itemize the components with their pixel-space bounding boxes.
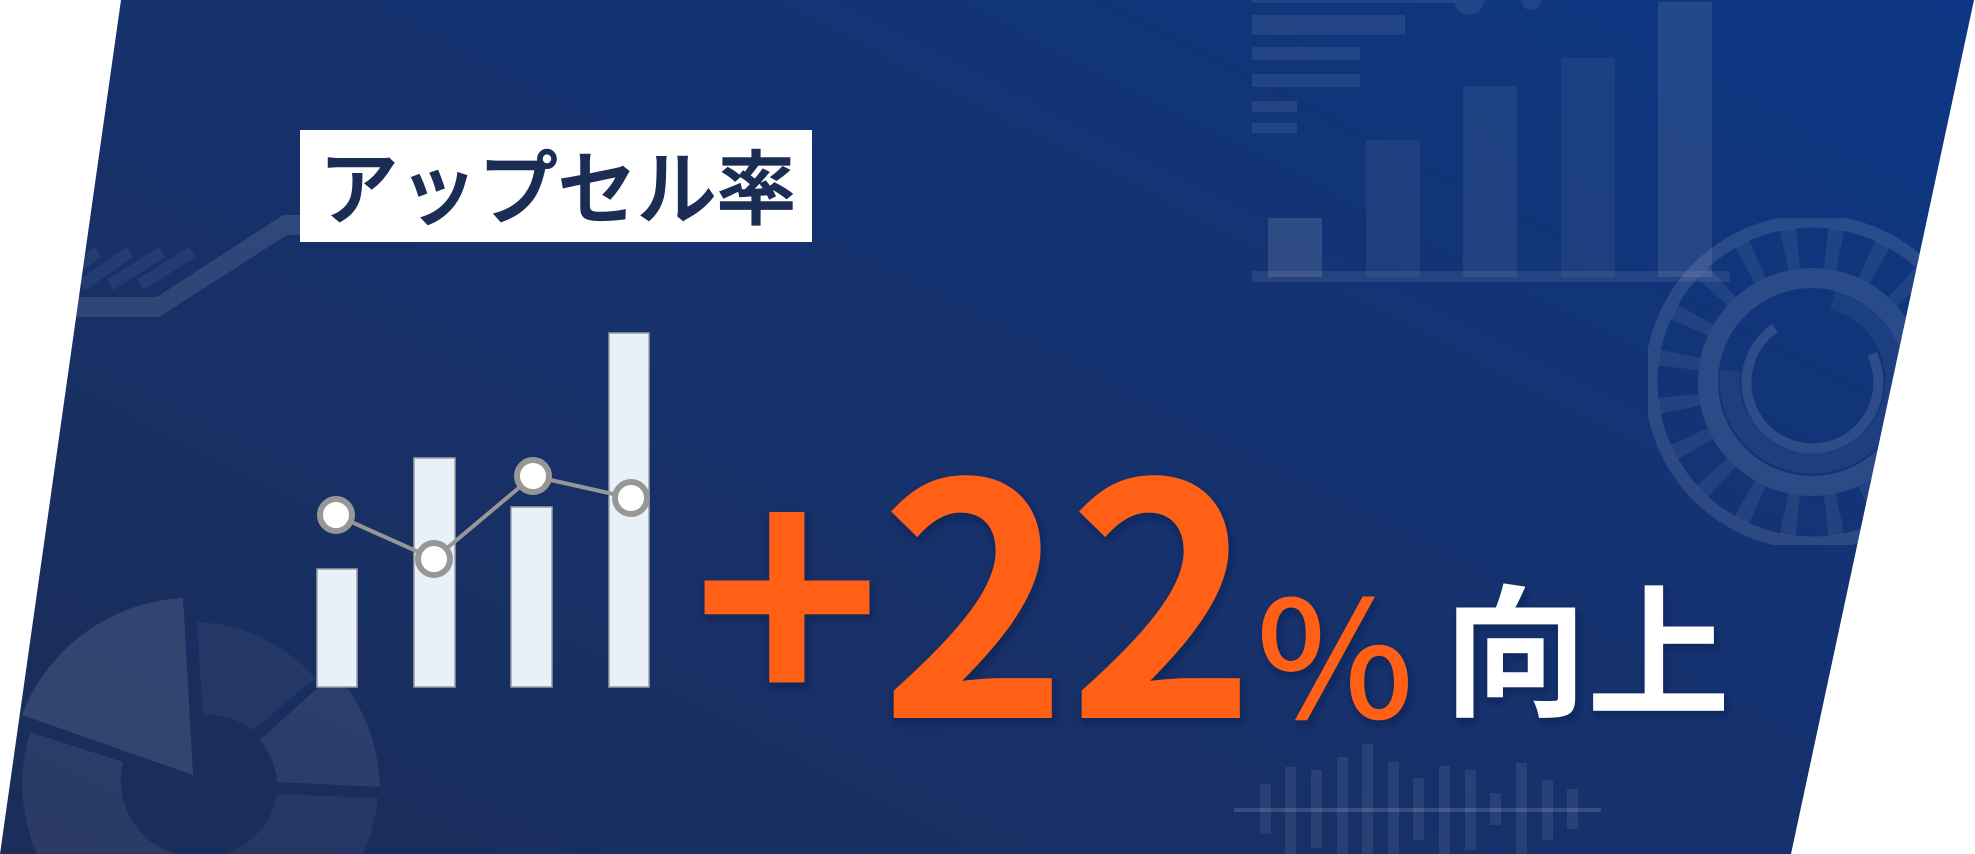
headline: +22% 向上 [692, 344, 1730, 811]
decoration: bottom-left donut chart [22, 598, 380, 854]
chart: bars with line overlay [317, 333, 649, 687]
decoration: circular gauge [1648, 218, 1920, 545]
decoration: top-right bar chart [1252, 0, 1730, 282]
value: percent sign: % [1256, 530, 1414, 765]
decoration: bottom waveform [1234, 744, 1601, 854]
value: 22: 22 [880, 344, 1256, 811]
bars [317, 333, 649, 687]
value: plus sign: + [692, 344, 882, 811]
text: 向上: 向上 [1444, 540, 1730, 747]
decoration: left line and stripes [60, 215, 300, 317]
label box: upsell rate [300, 125, 812, 242]
line with markers [320, 460, 647, 575]
heading: アップセル率: アップセル率 [319, 125, 796, 242]
